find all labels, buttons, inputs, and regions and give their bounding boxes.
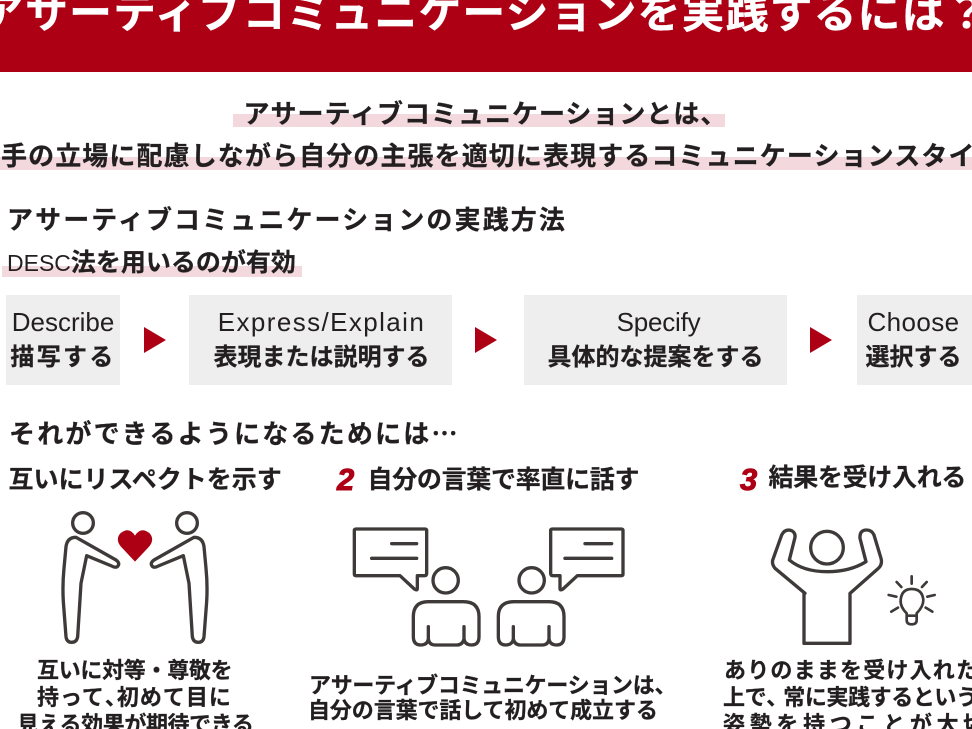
caption line 1: 互いに対等・尊敬を — [37, 658, 232, 683]
arrow 3 — [810, 327, 832, 353]
step box: Describe — [6, 295, 120, 385]
caption line 2: 持って、初めて目に — [37, 685, 232, 710]
step label: Choose — [867, 307, 960, 337]
step box: Express/Explain — [189, 295, 452, 385]
step description: 選択する — [866, 344, 962, 371]
point 3 heading: 結果を受け入れる — [768, 464, 966, 492]
step description: 描写する — [10, 344, 116, 371]
definition highlight line 2 — [0, 157, 972, 170]
arrow 2 — [475, 327, 497, 353]
caption line 1: アサーティブコミュニケーションは、 — [309, 673, 676, 698]
step description: 表現または説明する — [214, 344, 430, 371]
definition highlight line 1 — [233, 114, 725, 127]
definition line 1: アサーティブコミュニケーションとは、 — [244, 98, 727, 128]
section heading: practice method: アサーティブコミュニケーションの実践方法 — [7, 204, 567, 234]
icon: two people exchanging a heart — [61, 511, 209, 644]
icon: person raising arms with light bulb — [770, 528, 936, 645]
title banner — [0, 0, 972, 72]
step box: Choose — [857, 295, 972, 385]
step label: Specify — [617, 307, 700, 337]
point 2 heading: 自分の言葉で率直に話す — [368, 466, 639, 494]
step description: 具体的な提案をする — [548, 344, 764, 371]
point 1 heading: 互いにリスペクトを示す — [8, 466, 282, 494]
arrow 1 — [144, 327, 166, 353]
step label: Describe — [12, 307, 114, 337]
caption line 2: 上で、常に実践するという — [723, 685, 972, 710]
DESC sub heading: DESC法を用いるのが有効 — [7, 249, 296, 277]
section heading: to be able to do that: それができるようになるためには… — [9, 414, 458, 451]
point 1 caption — [17, 658, 254, 729]
step box: Specify — [524, 295, 787, 385]
caption line 1: ありのままを受け入れた — [724, 658, 972, 683]
icon: two people talking with speech bubbles — [352, 527, 625, 647]
DESC highlight — [2, 266, 302, 277]
point 3 caption — [723, 658, 972, 729]
point 3 number: 3 — [740, 462, 757, 497]
step label: Express/Explain — [218, 307, 425, 337]
point 2 caption — [308, 673, 676, 723]
caption line 2: 自分の言葉で話して初めて成立する — [308, 698, 658, 723]
point 2 number: 2 — [337, 462, 354, 497]
